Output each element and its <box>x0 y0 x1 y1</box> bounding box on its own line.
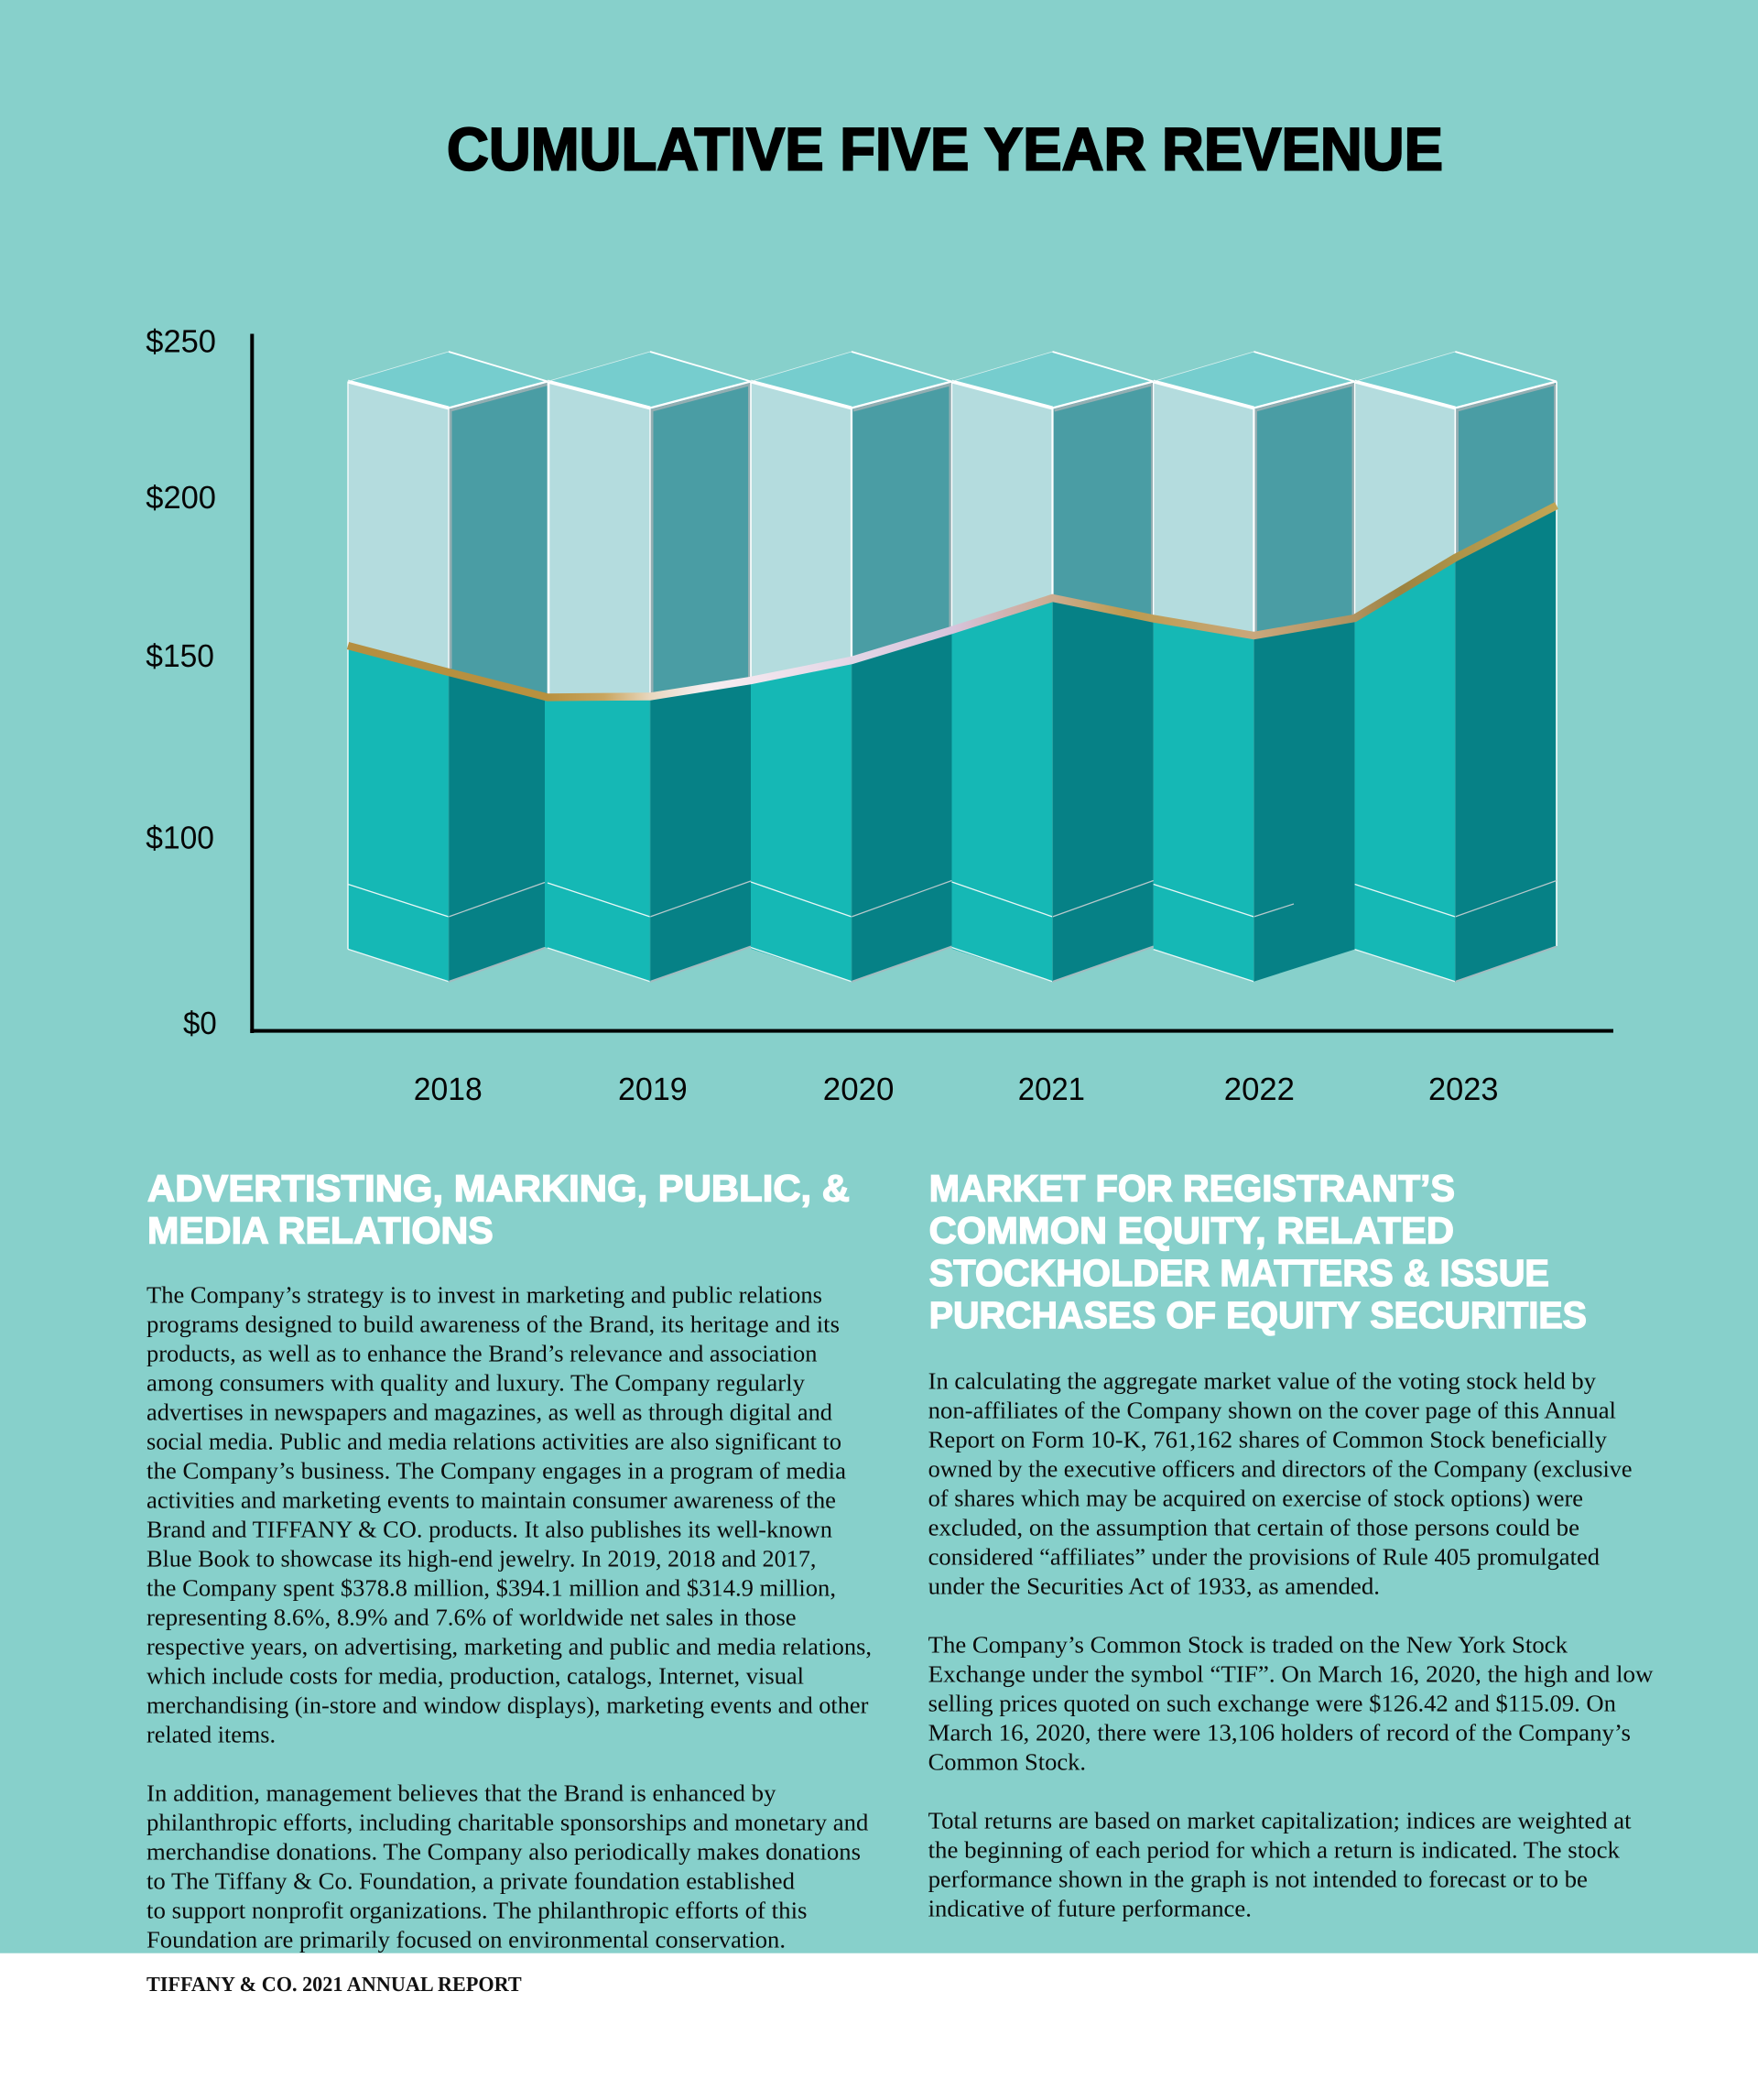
body text: aggregate market value paragraph: under the Securities Act of 1933, as amended. <box>928 1573 1380 1599</box>
lower chevron lines, side <box>449 881 1557 917</box>
column 2018 <box>348 352 548 982</box>
x axis labels: 2018 <box>414 1072 483 1107</box>
body text: philanthropy paragraph: philanthropic efforts, including charitable sponsorships and monetary and <box>146 1809 868 1835</box>
body text: advertising strategy paragraph: activities and marketing events to maintain consumer awareness of the <box>146 1486 836 1513</box>
heading: advertising <box>147 1168 850 1252</box>
white top back edges <box>449 352 1557 381</box>
white vertical edges <box>348 381 1557 949</box>
body text: total returns paragraph: the beginning of each period for which a return is indicated. The stock <box>928 1837 1620 1863</box>
body text: aggregate market value paragraph: excluded, on the assumption that certain of those persons could be <box>928 1515 1579 1540</box>
body text: advertising strategy paragraph: respective years, on advertising, marketing and public and media relations, <box>146 1633 872 1659</box>
x axis labels <box>414 1072 1498 1107</box>
body text: aggregate market value paragraph: In calculating the aggregate market value of the voting stock held by <box>928 1368 1596 1394</box>
body text: advertising strategy paragraph: which include costs for media, production, catalogs, Internet, visual <box>146 1662 804 1689</box>
body text: common stock paragraph: March 16, 2020, there were 13,106 holders of record of the Company’s <box>928 1720 1631 1746</box>
trend line <box>348 506 1557 697</box>
body text: advertising strategy paragraph: products, as well as to enhance the Brand’s relevance and association <box>146 1340 818 1366</box>
body text: total returns paragraph: Total returns are based on market capitalization; indices are weighted at <box>928 1808 1632 1833</box>
body text: philanthropy paragraph <box>146 1779 868 1953</box>
grey shadow edges on dark faces <box>450 385 1555 694</box>
body text: common stock paragraph: Common Stock. <box>928 1749 1086 1775</box>
body text: advertising strategy paragraph <box>146 1281 872 1747</box>
white top lower edges <box>348 381 1455 408</box>
y axis labels <box>146 324 217 1041</box>
axes <box>250 333 1613 1033</box>
body text: aggregate market value paragraph: considered “affiliates” under the provisions of Rule 405 promulgated <box>928 1544 1600 1570</box>
x axis labels: 2020 <box>823 1072 894 1107</box>
heading: market for registrant's equity: MARKET FOR REGISTRANT’S <box>929 1168 1455 1210</box>
body text: advertising strategy paragraph: social media. Public and media relations activities are also significant to <box>146 1428 841 1454</box>
column 2020 <box>751 352 952 982</box>
mid vertical divider <box>449 561 1455 982</box>
column 2019 <box>545 352 751 982</box>
heading: advertising: ADVERTISTING, MARKING, PUBLIC, & <box>147 1168 850 1210</box>
chart: cumulative revenue 3D columns <box>146 324 1613 1107</box>
y axis labels: $250 <box>146 324 216 360</box>
lower chevron lines, front <box>348 882 1455 982</box>
body text: aggregate market value paragraph: of shares which may be acquired on exercise of stock options) were <box>928 1485 1583 1511</box>
body text: advertising strategy paragraph: Blue Book to showcase its high-end jewelry. In 2019, 2018 and 2017, <box>146 1545 817 1572</box>
body text: advertising strategy paragraph: advertises in newspapers and magazines, as well as through digital and <box>146 1398 832 1425</box>
body text: advertising strategy paragraph: the Company’s business. The Company engages in a program of media <box>146 1457 846 1484</box>
x axis labels: 2021 <box>1018 1072 1085 1107</box>
body text: aggregate market value paragraph: owned by the executive officers and directors of the Company (exclusive <box>928 1456 1633 1482</box>
body text: philanthropy paragraph: In addition, management believes that the Brand is enhanced by <box>146 1779 776 1806</box>
body text: advertising strategy paragraph: merchandising (in-store and window displays), marketing events and other <box>146 1692 869 1718</box>
column edge highlights <box>348 352 1557 982</box>
title: CUMULATIVE FIVE YEAR REVENUE <box>447 115 1443 183</box>
y axis labels: $100 <box>146 821 214 855</box>
body text: common stock paragraph <box>928 1632 1654 1775</box>
body text: advertising strategy paragraph: programs designed to build awareness of the Brand, its heritage and its <box>146 1311 840 1337</box>
body text: advertising strategy paragraph: Brand and TIFFANY & CO. products. It also publishes its well-known <box>146 1516 832 1542</box>
heading: market for registrant's equity: COMMON EQUITY, RELATED <box>929 1210 1454 1252</box>
body text: philanthropy paragraph: to The Tiffany & Co. Foundation, a private foundation established <box>146 1867 795 1894</box>
y axis labels: $150 <box>146 638 214 674</box>
body text: advertising strategy paragraph: related items. <box>146 1721 276 1747</box>
panel: advertising text column <box>146 1168 872 1953</box>
footer: TIFFANY & CO. 2021 ANNUAL REPORT <box>146 1973 522 1996</box>
x axis labels: 2022 <box>1224 1072 1295 1107</box>
body text: philanthropy paragraph: Foundation are primarily focused on environmental conservation. <box>146 1926 786 1953</box>
body text: total returns paragraph <box>928 1808 1632 1921</box>
body text: common stock paragraph: Exchange under the symbol “TIF”. On March 16, 2020, the high and low <box>928 1661 1654 1687</box>
column 2022 <box>1154 352 1355 982</box>
body text: aggregate market value paragraph: non-affiliates of the Company shown on the cover page of this Annual <box>928 1398 1616 1423</box>
x axis labels: 2019 <box>618 1072 688 1107</box>
y axis labels: $200 <box>146 480 216 516</box>
x axis labels: 2023 <box>1428 1072 1498 1107</box>
white top right edges <box>449 381 1557 408</box>
body text: common stock paragraph: The Company’s Common Stock is traded on the New York Stock <box>928 1632 1568 1658</box>
y axis labels: $0 <box>183 1006 217 1041</box>
body text: philanthropy paragraph: merchandise donations. The Company also periodically makes donations <box>146 1838 861 1865</box>
panel: market for common equity text column <box>928 1168 1654 1921</box>
body text: total returns paragraph: performance shown in the graph is not intended to forecast or to be <box>928 1866 1588 1892</box>
heading: market for registrant's equity: STOCKHOLDER MATTERS & ISSUE <box>929 1252 1549 1294</box>
heading: advertising: MEDIA RELATIONS <box>147 1210 494 1252</box>
body text: advertising strategy paragraph: The Company’s strategy is to invest in marketing and public relations <box>146 1281 822 1308</box>
body text: advertising strategy paragraph: among consumers with quality and luxury. The Company regularly <box>146 1369 805 1396</box>
heading: market for registrant's equity: PURCHASES OF EQUITY SECURITIES <box>929 1294 1587 1336</box>
body text: total returns paragraph: indicative of future performance. <box>928 1896 1252 1921</box>
column 2023 <box>1355 352 1557 982</box>
body text: aggregate market value paragraph <box>928 1368 1633 1599</box>
body text: common stock paragraph: selling prices quoted on such exchange were $126.42 and $115.09. On <box>928 1691 1616 1716</box>
body text: advertising strategy paragraph: the Company spent $378.8 million, $394.1 million and $314.9 million, <box>146 1574 836 1601</box>
heading: market for registrant's equity <box>929 1168 1587 1336</box>
body text: philanthropy paragraph: to support nonprofit organizations. The philanthropic efforts of this <box>146 1897 808 1923</box>
body text: aggregate market value paragraph: Report on Form 10-K, 761,162 shares of Common Stock beneficially <box>928 1427 1607 1453</box>
column 2021 <box>952 352 1154 982</box>
body text: advertising strategy paragraph: representing 8.6%, 8.9% and 7.6% of worldwide net sales in those <box>146 1604 797 1630</box>
